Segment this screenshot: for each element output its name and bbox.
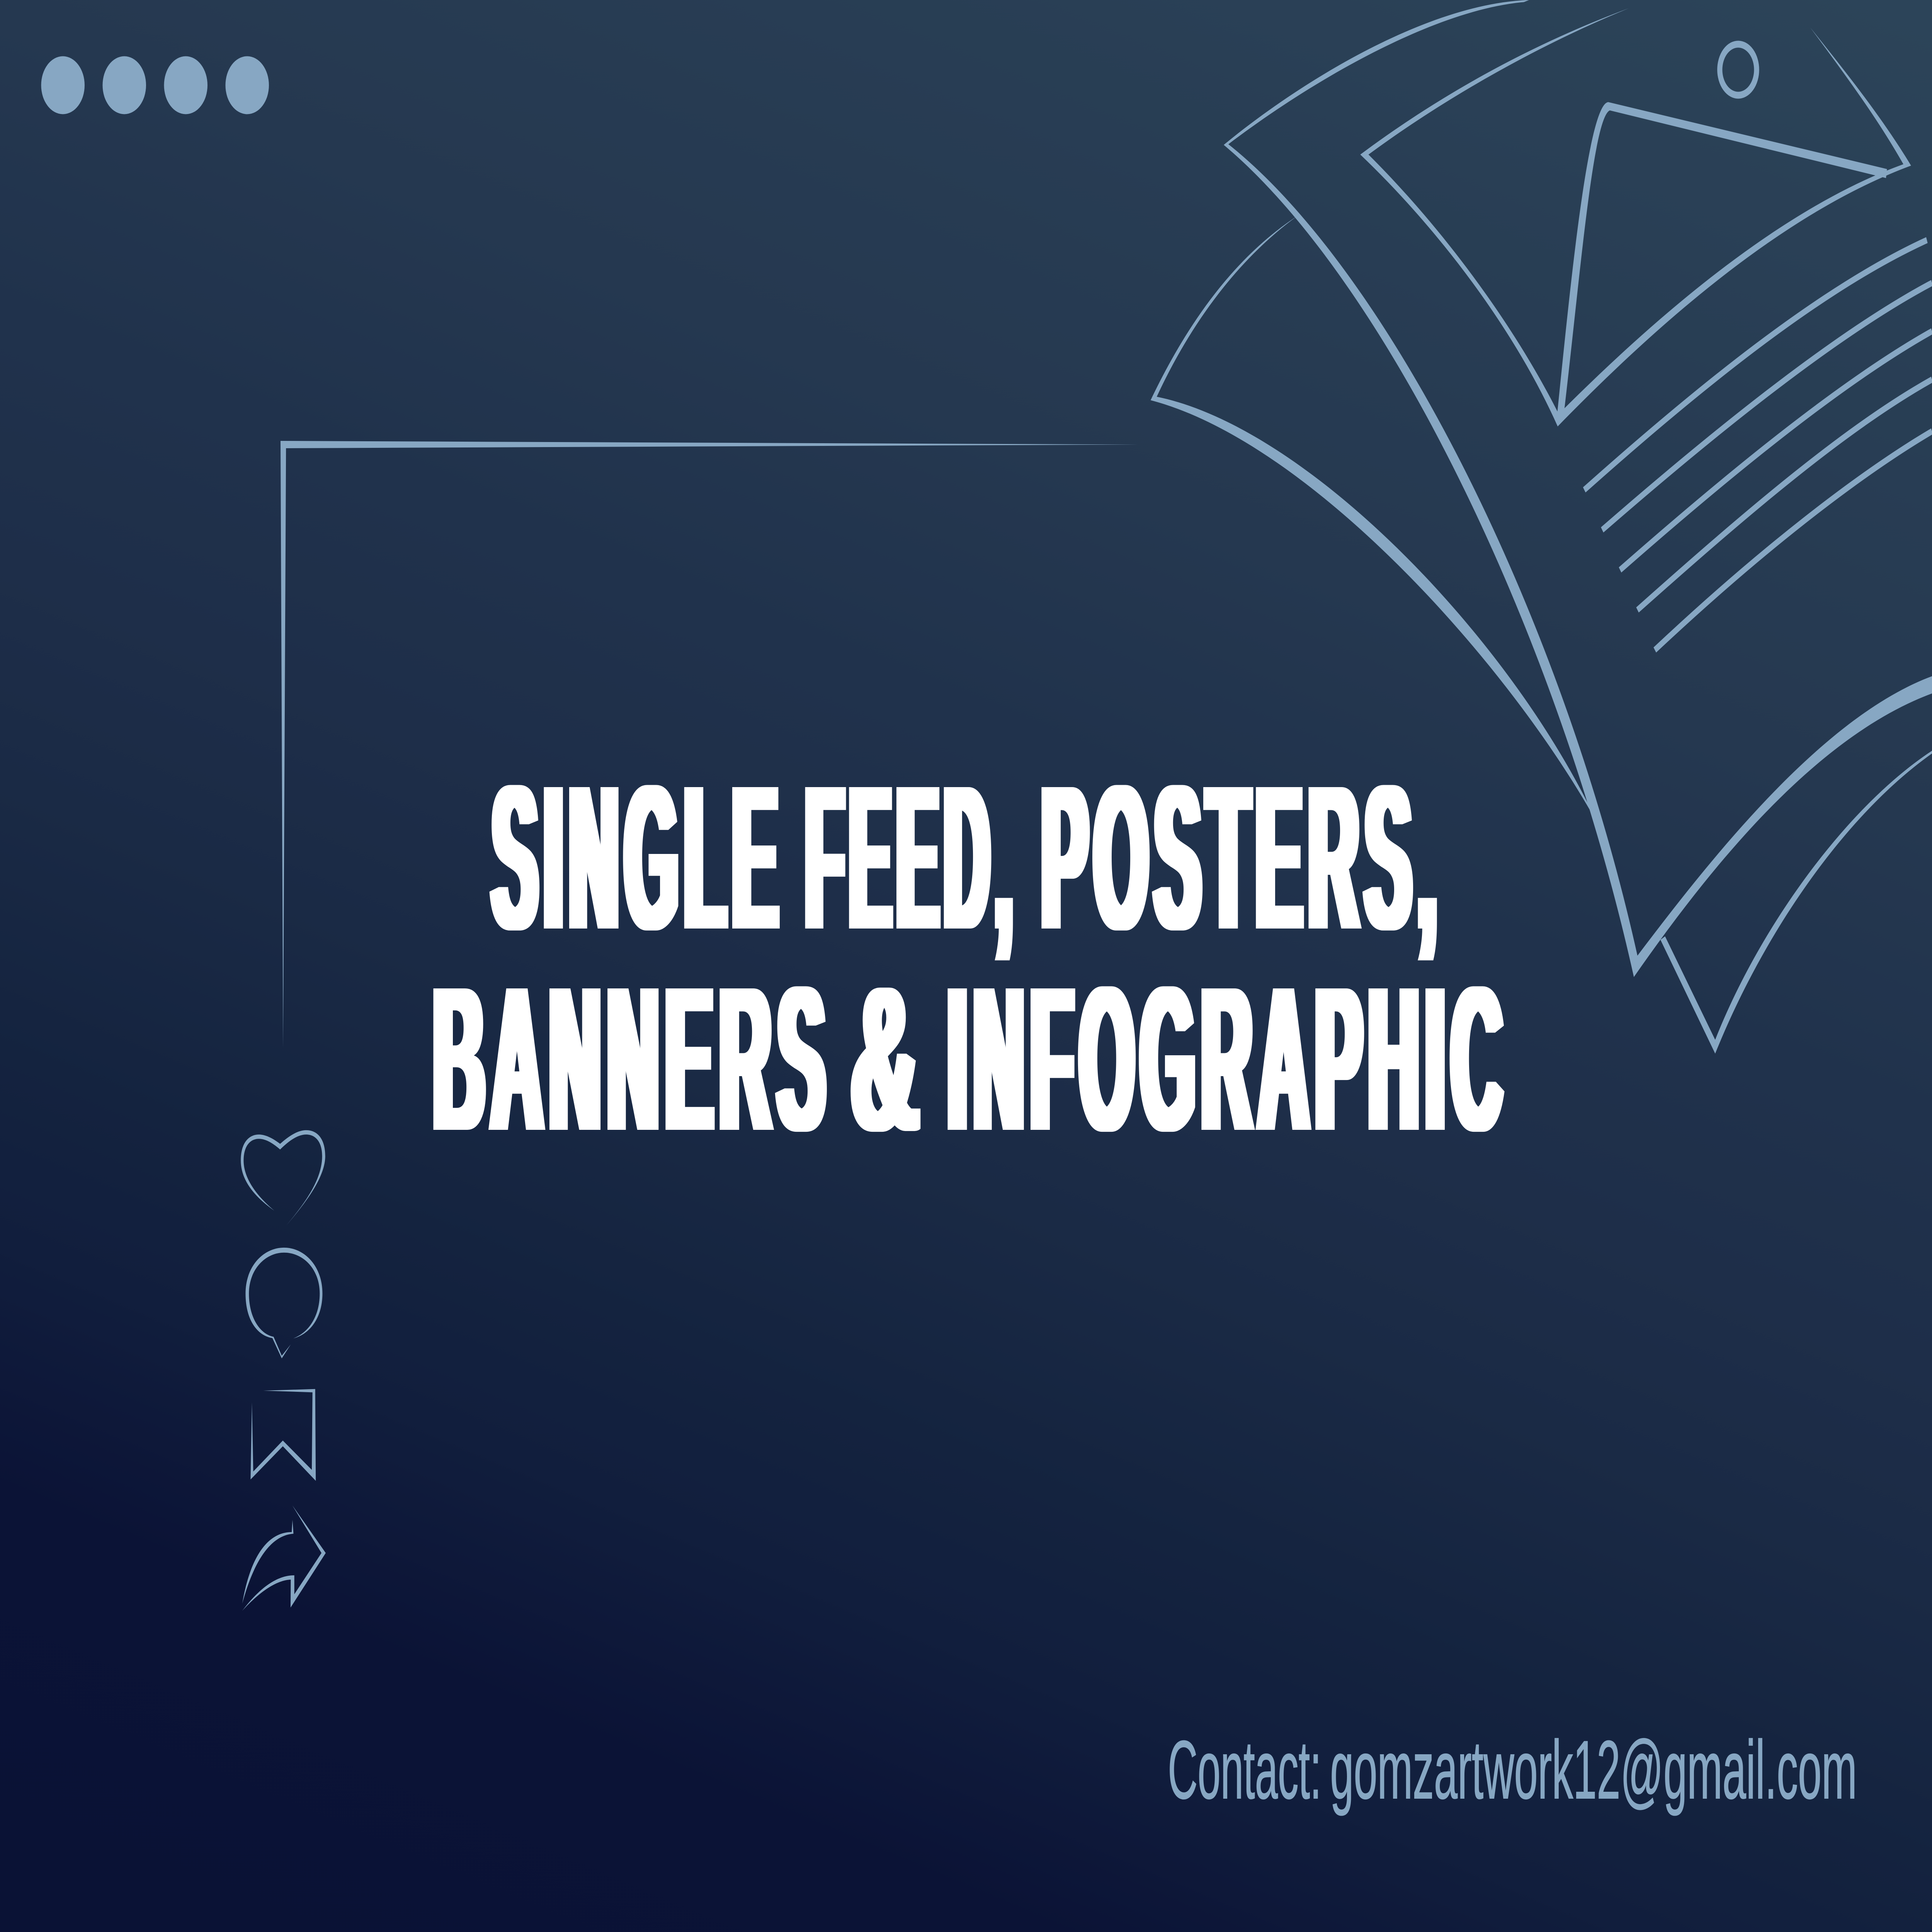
front sheet outline [1360, 8, 1911, 427]
title line 2: & [851, 944, 928, 1173]
icon: share arrow [242, 1505, 326, 1611]
text lines on the sheet [1584, 240, 1932, 650]
image placeholder triangle [1557, 102, 1887, 414]
contact line: Contact: [1168, 1724, 1321, 1816]
title [433, 742, 1509, 1173]
title line 1: SINGLE [492, 742, 784, 972]
title: POSTERS, [1041, 742, 1444, 972]
contact line [1168, 1724, 1857, 1816]
icon: bookmark [250, 1389, 316, 1481]
social icons column [241, 1130, 326, 1611]
back bottom sheet [1660, 751, 1932, 1054]
icon: heart [241, 1130, 325, 1225]
icon: comment bubble [245, 1248, 322, 1359]
title line 1 [492, 742, 1444, 972]
image placeholder circle [1720, 44, 1757, 95]
title line 2: BANNERS [433, 944, 832, 1173]
window dots [41, 56, 269, 114]
back left sheet [1151, 216, 1598, 825]
illustration: flying paper sheets [1151, 0, 1932, 1054]
corner frame line [281, 441, 1138, 1048]
main sheet outline [1224, 0, 1932, 977]
title line 1: FEED, [806, 742, 1018, 972]
